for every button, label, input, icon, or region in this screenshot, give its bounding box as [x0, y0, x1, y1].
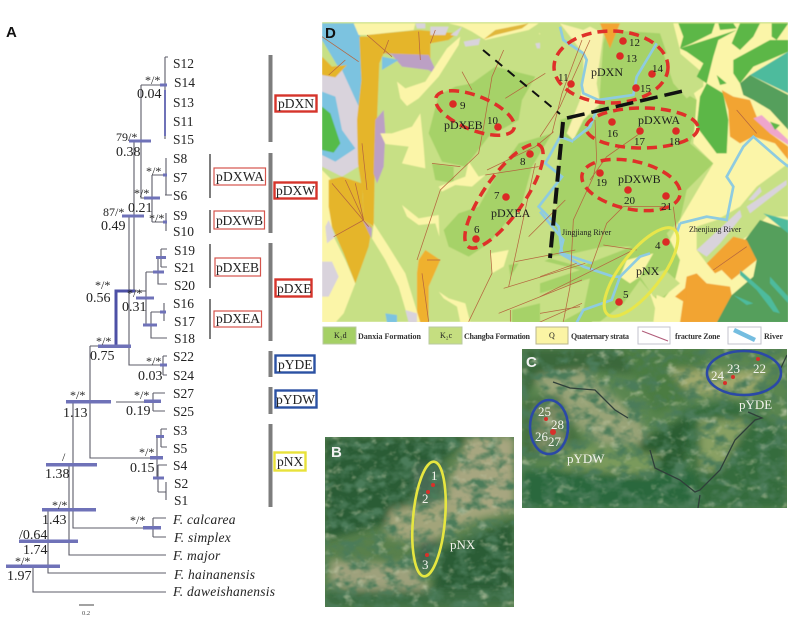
- map labels: Jingjiang River: [562, 228, 611, 237]
- map labels: 4: [655, 240, 661, 252]
- pYDE cluster: [707, 351, 781, 395]
- label pDXEB: pDXEB: [216, 260, 259, 275]
- outer clade bars: [268, 55, 272, 507]
- map labels: 17: [634, 136, 646, 148]
- labels C: [535, 361, 772, 466]
- support values: */*: [149, 211, 164, 225]
- panel B: satellite image: [325, 437, 514, 607]
- support values: 79/*: [116, 130, 137, 144]
- label pNX: pNX: [277, 454, 303, 469]
- thick highlighted branch: [116, 291, 135, 346]
- support values: 1.38: [45, 467, 70, 482]
- tip labels: [172, 56, 275, 599]
- map labels: [444, 37, 742, 301]
- rivers: [539, 27, 788, 323]
- satellite background: [522, 349, 787, 508]
- tree branches: [33, 57, 172, 592]
- map labels: 9: [460, 100, 466, 112]
- scale bar: 0.2: [82, 610, 90, 617]
- tip labels: S4: [173, 458, 188, 473]
- support values: 1.13: [63, 406, 88, 421]
- tip labels: S12: [173, 56, 194, 71]
- map labels: 8: [520, 156, 526, 168]
- label pDXE: pDXE: [277, 281, 312, 296]
- tip labels: S5: [173, 441, 188, 456]
- panel D: geological map: [322, 22, 788, 327]
- labels C: 25: [538, 404, 551, 419]
- legend: River: [728, 327, 783, 344]
- label pDXN: pDXN: [278, 96, 314, 111]
- labels B: pNX: [450, 537, 476, 552]
- map labels: 7: [494, 190, 500, 202]
- support values: 87/*: [103, 205, 124, 219]
- labels C: pYDE: [739, 397, 772, 412]
- legend: fracture Zone: [638, 327, 720, 344]
- satellite background: [325, 437, 514, 607]
- legend: Danxia Formation: [323, 327, 422, 344]
- tip labels: S8: [173, 151, 188, 166]
- legend: Changba Formation: [429, 327, 531, 344]
- tip labels: S20: [174, 278, 195, 293]
- tip labels: S27: [173, 386, 194, 401]
- labels B: 2: [422, 491, 428, 506]
- labels B: 1: [431, 468, 438, 483]
- tip labels: S9: [173, 208, 188, 223]
- tip labels: S22: [173, 349, 194, 364]
- scale bar: [79, 605, 94, 617]
- label pYDE: pYDE: [278, 357, 312, 372]
- map labels: 10: [487, 115, 498, 127]
- tip labels: S11: [173, 114, 194, 129]
- panel label D: D: [325, 25, 336, 42]
- sample sites C: [544, 357, 760, 435]
- label pDXWA: pDXWA: [216, 169, 264, 184]
- labels C: 27: [548, 434, 562, 449]
- tip labels: S21: [174, 260, 195, 275]
- legend: Quaternary strata: Quaternary strata: [571, 332, 629, 341]
- map labels: 16: [607, 128, 618, 140]
- support values: */*: [130, 513, 145, 527]
- labels B: [422, 468, 476, 572]
- support values: */*: [96, 334, 111, 348]
- tip labels: F. calcarea: [172, 512, 236, 527]
- tip labels: S1: [174, 493, 188, 508]
- map labels: 21: [661, 201, 672, 213]
- tip labels: S2: [174, 476, 188, 491]
- legend: Changba Formation: Changba Formation: [464, 332, 531, 341]
- labels C: 23: [727, 361, 740, 376]
- tip labels: S14: [174, 75, 195, 90]
- tip labels: S3: [173, 423, 188, 438]
- map legend: [323, 327, 783, 344]
- support values: 0.38: [116, 145, 140, 160]
- node age bars: [6, 84, 167, 568]
- map labels: Zhenjiang River: [689, 225, 742, 234]
- map labels: pDXN: [591, 65, 623, 79]
- support values: 0.15: [130, 461, 154, 476]
- map base: [322, 22, 788, 323]
- tip labels: S15: [173, 132, 194, 147]
- sample sites: [449, 37, 680, 306]
- panel label C: C: [526, 354, 537, 371]
- support values: */*: [134, 388, 149, 402]
- support values: 0.75: [90, 349, 114, 364]
- panel label A: A: [6, 24, 17, 41]
- map labels: 12: [629, 37, 640, 49]
- fracture lines: [322, 30, 757, 323]
- inner clade bars: [209, 154, 211, 339]
- tip labels: F. daweishanensis: [172, 584, 275, 599]
- tip labels: S25: [173, 404, 194, 419]
- map labels: pDXWA: [638, 113, 680, 127]
- pNX cluster: [408, 460, 450, 578]
- labels C: 26: [535, 429, 548, 444]
- labels C: 22: [753, 361, 766, 376]
- tip labels: S18: [174, 331, 195, 346]
- support values: 0.49: [101, 219, 126, 234]
- label pDXEA: pDXEA: [216, 311, 260, 326]
- fault lines: [483, 50, 683, 258]
- tip labels: S7: [173, 170, 188, 185]
- pNX cluster: [592, 217, 690, 327]
- legend: River: River: [764, 332, 783, 341]
- tip labels: S16: [173, 296, 194, 311]
- support values: */*: [52, 498, 67, 512]
- support values: 1.97: [7, 569, 32, 584]
- support values: [7, 73, 164, 584]
- support values: 0.19: [126, 404, 150, 419]
- support values: 0.21: [128, 201, 152, 216]
- map labels: 20: [624, 195, 636, 207]
- support values: */*: [145, 73, 160, 87]
- support values: 0.04: [137, 87, 162, 102]
- panel: phylogenetic tree: [6, 56, 275, 617]
- support values: */*: [70, 388, 85, 402]
- pYDW cluster: [530, 400, 568, 454]
- tip labels: S6: [173, 188, 188, 203]
- tip labels: F. hainanensis: [173, 567, 255, 582]
- map labels: 15: [640, 83, 652, 95]
- support values: 0.03: [138, 369, 162, 384]
- tip labels: S13: [173, 95, 194, 110]
- map labels: 19: [596, 177, 608, 189]
- map labels: pDXEA: [491, 206, 531, 220]
- map labels: 6: [474, 224, 480, 236]
- support values: /0.64: [19, 528, 47, 543]
- rivers in image C: [553, 355, 787, 508]
- legend: Danxia Formation: Danxia Formation: [358, 332, 422, 341]
- tip labels: S17: [174, 314, 195, 329]
- support values: 0.56: [86, 291, 110, 306]
- support values: /: [62, 450, 66, 464]
- label pDXW: pDXW: [276, 183, 315, 198]
- tip labels: S10: [173, 224, 194, 239]
- tip labels: S24: [173, 368, 194, 383]
- legend: Danxia Formation: K₂d: [334, 331, 347, 340]
- tip labels: S19: [174, 243, 195, 258]
- map labels: pDXEB: [444, 118, 483, 132]
- label pYDW: pYDW: [276, 392, 315, 407]
- map labels: 13: [626, 53, 638, 65]
- legend: Quaternary strata: [536, 327, 629, 344]
- map labels: 5: [623, 289, 629, 301]
- support values: */*: [146, 354, 161, 368]
- tip labels: F. major: [172, 548, 221, 563]
- labels C: 24: [711, 368, 724, 383]
- labels C: pYDW: [567, 451, 605, 466]
- support values: */*: [134, 186, 149, 200]
- support values: */*: [95, 278, 110, 292]
- panel label B: B: [331, 444, 342, 461]
- map labels: 11: [558, 72, 569, 84]
- tip labels: F. simplex: [173, 530, 231, 545]
- map labels: 18: [669, 136, 680, 148]
- support values: */*: [146, 164, 161, 178]
- support values: 0.31: [122, 300, 146, 315]
- sample sites B: [425, 483, 435, 557]
- legend: fracture Zone: fracture Zone: [675, 332, 720, 341]
- labels C: 28: [551, 417, 564, 432]
- support values: */*: [139, 445, 154, 459]
- map labels: pDXWB: [618, 172, 661, 186]
- support values: 1.74: [23, 543, 48, 558]
- panel C: satellite image: [522, 349, 787, 508]
- support values: 1.43: [42, 513, 66, 528]
- labels B: 3: [422, 557, 428, 572]
- sampling clusters: [430, 31, 698, 258]
- clade bars and labels: [209, 55, 316, 507]
- legend: Quaternary strata: Q: [549, 331, 555, 340]
- legend: Changba Formation: K₂c: [440, 331, 453, 340]
- map labels: 14: [652, 63, 664, 75]
- label pDXWB: pDXWB: [216, 213, 263, 228]
- map labels: pNX: [636, 264, 660, 278]
- support values: */*: [127, 286, 142, 300]
- support values: */*: [15, 554, 30, 568]
